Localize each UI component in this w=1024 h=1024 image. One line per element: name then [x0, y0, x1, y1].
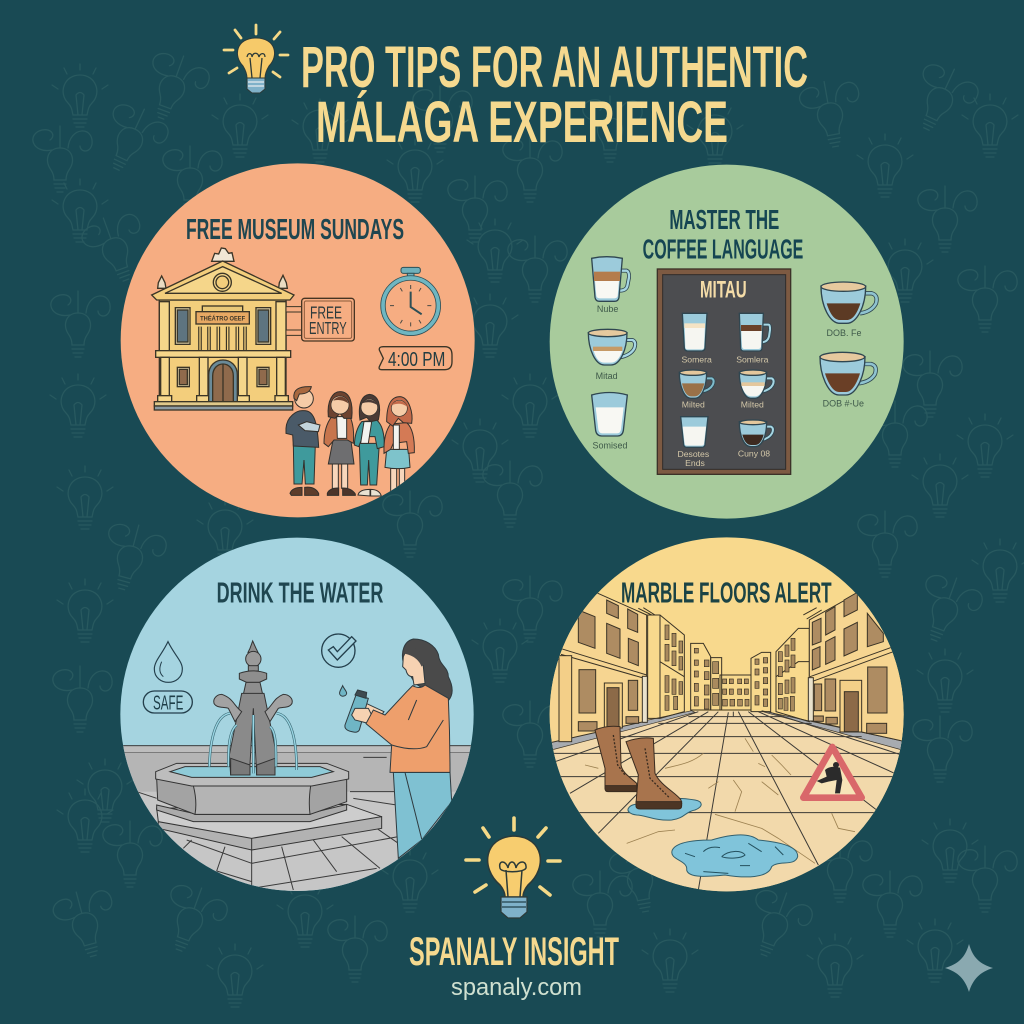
icon: stopwatch	[383, 267, 438, 333]
boots	[595, 726, 682, 809]
safe badge	[143, 691, 192, 714]
menu board: Ends	[685, 458, 706, 468]
heading: master the coffee language: MASTER THE	[669, 204, 779, 235]
building: right second	[776, 628, 809, 722]
panel: free museum sundays: THÉÁTRO OEEF	[200, 314, 245, 323]
panel: free museum sundays	[121, 163, 475, 517]
cup: nube: Nube	[597, 304, 618, 314]
cup: mitad	[588, 329, 635, 381]
board cup 4	[739, 370, 774, 398]
museum building	[152, 248, 294, 410]
water jets	[209, 713, 297, 773]
heading: drink the water: DRINK THE WATER	[217, 578, 384, 610]
safe badge: SAFE	[153, 692, 183, 714]
cup: espresso lower right: DOB #-Ue	[823, 399, 864, 409]
visitor 2	[324, 392, 355, 495]
building: left second	[648, 615, 684, 718]
heading: master the coffee language	[643, 210, 803, 259]
puddle: large	[672, 835, 798, 877]
menu board: Milted	[682, 399, 705, 409]
menu board: MITAU	[700, 277, 747, 304]
boot: front	[626, 738, 682, 809]
cup: mitad: Mitad	[596, 371, 618, 381]
visitors group	[286, 387, 414, 496]
boot: back	[595, 726, 637, 792]
building: right front	[803, 590, 908, 742]
footer url: spanaly.com	[451, 974, 582, 1001]
street floor	[545, 711, 908, 895]
cup: nube	[592, 257, 629, 314]
cup: espresso top right	[821, 282, 877, 338]
sign: free entry	[286, 298, 354, 341]
menu board: Desotes	[677, 449, 710, 459]
sign: free entry: FREE	[310, 302, 342, 322]
woman with bottle	[340, 639, 452, 858]
menu board: Milted	[741, 399, 764, 409]
board cup 6	[739, 420, 773, 447]
title: MÁLAGA EXPERIENCE	[316, 90, 728, 155]
puddle: small	[628, 798, 701, 820]
time label: 4:00 PM: 4:00 PM	[388, 348, 445, 371]
footer brand: SPANALY INSIGHT	[409, 930, 619, 974]
menu board	[657, 269, 791, 474]
visitor 3	[354, 394, 384, 496]
board cup 3	[679, 370, 714, 398]
menu board: Somera	[682, 354, 712, 364]
icon: water drop	[154, 642, 182, 682]
visitor 1	[286, 387, 320, 495]
panel: master the coffee language	[550, 165, 904, 519]
heading: marble floors alert: MARBLE FLOORS ALERT	[621, 577, 832, 609]
warning sign	[803, 747, 862, 798]
icon: title light bulb	[224, 25, 288, 93]
icon: check mark	[322, 634, 356, 667]
building: left front	[550, 592, 655, 743]
menu board: Cuny 08	[738, 449, 770, 459]
cup: espresso lower right	[820, 352, 876, 409]
board mug 2	[739, 313, 770, 351]
icon: sparkle	[945, 944, 993, 992]
sign: free entry: ENTRY	[309, 318, 347, 338]
heading: master the coffee language: COFFEE LANGUAGE	[643, 233, 803, 264]
buildings: far street	[691, 643, 771, 712]
title	[301, 35, 808, 155]
board glass 5	[681, 417, 708, 447]
fountain basin	[156, 763, 382, 850]
cup: espresso top right: DOB. Fe	[827, 328, 861, 338]
cup: somised	[592, 392, 627, 451]
fountain column	[214, 641, 292, 775]
panel: marble floors alert	[542, 537, 908, 895]
board glass 1	[682, 313, 707, 351]
plaza ground	[120, 746, 474, 898]
cup: somised: Somised	[593, 441, 627, 451]
menu board: Somlera	[736, 354, 769, 364]
panel: drink the water	[120, 538, 474, 898]
heading: free museum sundays: FREE MUSEUM SUNDAYS	[186, 214, 404, 246]
visitor 4	[384, 397, 414, 492]
icon: footer light bulb	[466, 818, 560, 918]
